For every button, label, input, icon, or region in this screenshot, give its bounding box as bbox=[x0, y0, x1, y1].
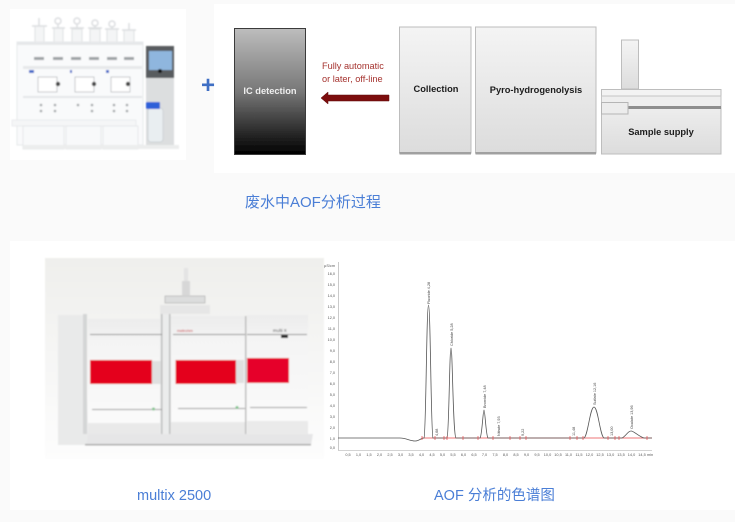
panel: process diagram background bbox=[214, 4, 735, 173]
y axis labels: 2,0 bbox=[330, 426, 335, 430]
x axis labels: 9,5 bbox=[534, 453, 540, 457]
arrow label bbox=[322, 61, 384, 84]
x axis labels: 13,5 bbox=[617, 453, 625, 457]
box: IC detection bbox=[234, 28, 306, 154]
y axis labels: 14,0 bbox=[328, 294, 335, 298]
caption: process: 废水中AOF分析过程 bbox=[245, 194, 381, 211]
icon: extraction instrument bbox=[12, 18, 179, 149]
peak labels: Bromide 7,48 bbox=[483, 385, 487, 408]
signal trace bbox=[338, 305, 652, 441]
peak labels: 11,48 bbox=[572, 427, 576, 436]
y axis labels: 13,0 bbox=[328, 305, 335, 309]
x axis labels: 2,5 bbox=[387, 453, 393, 457]
y axis labels: 6,0 bbox=[330, 382, 335, 386]
photo: multiX 2500 instrument: multi X bbox=[273, 328, 287, 333]
x axis labels: 7,5 bbox=[492, 453, 498, 457]
x axis labels: min bbox=[647, 453, 653, 457]
peak labels: Oxalate 13,96 bbox=[630, 405, 634, 429]
caption: instrument: multix 2500 bbox=[137, 488, 211, 504]
x axis labels: 1,0 bbox=[356, 453, 361, 457]
x axis labels: 14,5 bbox=[638, 453, 646, 457]
y axis labels: 9,0 bbox=[330, 349, 335, 353]
x axis labels: 2,0 bbox=[377, 453, 382, 457]
x axis labels: 3,0 bbox=[398, 453, 403, 457]
box: IC detection: IC detection bbox=[243, 86, 297, 96]
x axis labels bbox=[345, 453, 653, 457]
y axis labels: 1,0 bbox=[330, 437, 335, 441]
caption: chromatogram: AOF 分析的色谱图 bbox=[434, 487, 555, 504]
chromatogram bbox=[324, 262, 653, 461]
x axis labels: 1,5 bbox=[366, 453, 372, 457]
peak labels: 9,22 bbox=[521, 429, 525, 436]
box: Sample supply bbox=[602, 40, 721, 154]
box: Collection bbox=[400, 27, 471, 154]
photo: multiX 2500 instrument: metrohm bbox=[177, 328, 193, 333]
chart frame bbox=[326, 262, 653, 461]
x axis labels: 12,0 bbox=[586, 453, 593, 457]
x axis labels: 10,5 bbox=[554, 453, 562, 457]
peak labels: Nitrate 7,93 bbox=[497, 416, 501, 436]
y axis labels: 10,0 bbox=[328, 338, 335, 342]
process diagram bbox=[234, 27, 721, 154]
panel: background top left bbox=[10, 9, 186, 160]
x axis labels: 4,5 bbox=[429, 453, 435, 457]
x axis labels: 7,0 bbox=[482, 453, 487, 457]
peak labels: 13,00 bbox=[610, 426, 614, 436]
x axis labels: 10,0 bbox=[544, 453, 551, 457]
x axis labels: 5,5 bbox=[450, 453, 456, 457]
x axis labels: 3,5 bbox=[408, 453, 414, 457]
x axis labels: 11,5 bbox=[575, 453, 583, 457]
x axis labels: 9,0 bbox=[524, 453, 529, 457]
y axis labels: 0,0 bbox=[330, 446, 335, 450]
box: Pyro-hydrogenolysis: Pyro-hydrogenolysis bbox=[490, 85, 582, 95]
integration ticks bbox=[422, 436, 647, 440]
arrow label: or later, off-line bbox=[322, 74, 383, 84]
y axis labels bbox=[324, 264, 335, 450]
y axis labels: 7,0 bbox=[330, 371, 335, 375]
x axis labels: 5,0 bbox=[440, 453, 445, 457]
axes bbox=[338, 262, 652, 450]
box: Sample supply: Sample supply bbox=[628, 127, 695, 137]
y axis labels: 15,0 bbox=[328, 283, 335, 287]
y axis labels: 12,0 bbox=[328, 316, 335, 320]
y axis labels: 3,0 bbox=[330, 415, 335, 419]
x axis labels: 4,0 bbox=[419, 453, 424, 457]
peak labels: Fluoride 4,28 bbox=[427, 282, 431, 304]
peak labels: Sulfate 12,16 bbox=[593, 383, 597, 405]
x axis labels: 0,5 bbox=[345, 453, 351, 457]
y axis labels: 8,0 bbox=[330, 360, 335, 364]
arrow label: Fully automatic bbox=[322, 61, 384, 71]
x axis labels: 13,0 bbox=[607, 453, 614, 457]
photo: multiX 2500 instrument bbox=[45, 258, 324, 459]
arrow: to IC detection bbox=[321, 92, 389, 104]
y axis labels: 5,0 bbox=[330, 393, 335, 397]
peak labels: Chloride 5,28 bbox=[450, 323, 454, 346]
peak labels bbox=[427, 282, 634, 436]
y axis labels: 16,0 bbox=[328, 272, 335, 276]
x axis labels: 8,5 bbox=[513, 453, 519, 457]
box: Collection: Collection bbox=[414, 84, 459, 94]
peak labels: 4,68 bbox=[435, 429, 439, 436]
x axis labels: 12,5 bbox=[596, 453, 604, 457]
panel: bottom section background bbox=[10, 241, 735, 510]
y axis labels: 4,0 bbox=[330, 404, 335, 408]
integration baseline bbox=[422, 437, 652, 439]
x axis labels: 8,0 bbox=[503, 453, 508, 457]
x axis labels: 11,0 bbox=[565, 453, 572, 457]
box: Pyro-hydrogenolysis bbox=[476, 27, 596, 154]
x axis labels: 14,0 bbox=[628, 453, 635, 457]
x axis labels: 6,0 bbox=[461, 453, 466, 457]
icon: plus sign: + bbox=[201, 72, 215, 99]
y axis labels: 11,0 bbox=[328, 327, 335, 331]
y axis labels: µS/cm bbox=[324, 264, 335, 268]
x axis labels: 6,5 bbox=[471, 453, 477, 457]
